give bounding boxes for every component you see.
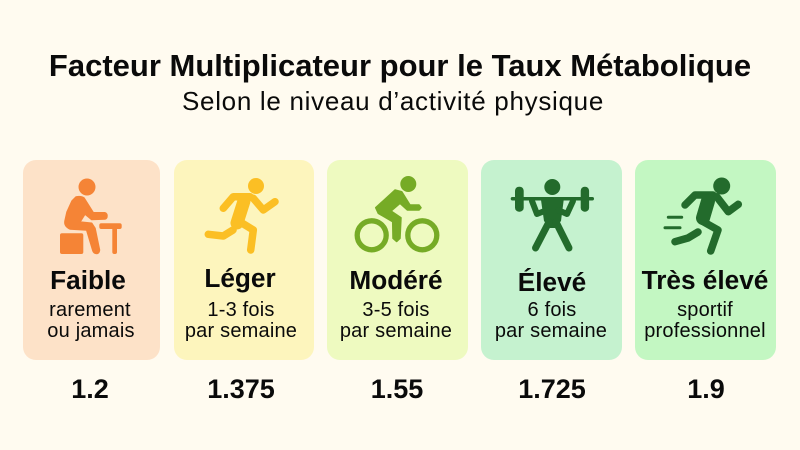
panel: faible xyxy=(23,160,160,360)
icon: runner xyxy=(208,178,275,250)
panel: leger xyxy=(174,160,314,360)
description: modere: 3-5 fois xyxy=(362,299,430,321)
description: modere: par semaine xyxy=(340,320,452,342)
heading: modere: Modéré xyxy=(349,265,443,295)
description: eleve: 6 fois xyxy=(527,299,577,321)
value: faible: 1.2 xyxy=(71,374,109,404)
description: eleve: par semaine xyxy=(495,320,607,342)
value: eleve: 1.725 xyxy=(518,374,586,404)
heading: eleve: Élevé xyxy=(518,267,586,297)
heading: leger: Léger xyxy=(204,263,276,293)
heading: tres eleve: Très élevé xyxy=(642,265,768,295)
value: leger: 1.375 xyxy=(207,374,275,404)
subtitle: Selon le niveau d’activité physique xyxy=(182,86,604,116)
title: Facteur Multiplicateur pour le Taux Métabolique xyxy=(49,48,751,83)
description: leger: par semaine xyxy=(185,320,297,342)
icon: weightlifter xyxy=(511,179,594,248)
description: faible: ou jamais xyxy=(47,320,135,342)
panel: modere xyxy=(327,160,468,360)
panel: eleve xyxy=(481,160,622,360)
icon: cyclist xyxy=(357,176,437,250)
icon: person sitting at desk xyxy=(60,178,122,254)
description: tres eleve: professionnel xyxy=(644,320,766,342)
value: tres eleve: 1.9 xyxy=(687,374,725,404)
description: leger: 1-3 fois xyxy=(207,299,275,321)
heading: faible: Faible xyxy=(50,265,126,295)
panel: tres eleve xyxy=(635,160,776,360)
icon: sprinter xyxy=(665,178,738,251)
description: tres eleve: sportif xyxy=(677,299,733,321)
description: faible: rarement xyxy=(49,299,131,321)
value: modere: 1.55 xyxy=(371,374,423,404)
